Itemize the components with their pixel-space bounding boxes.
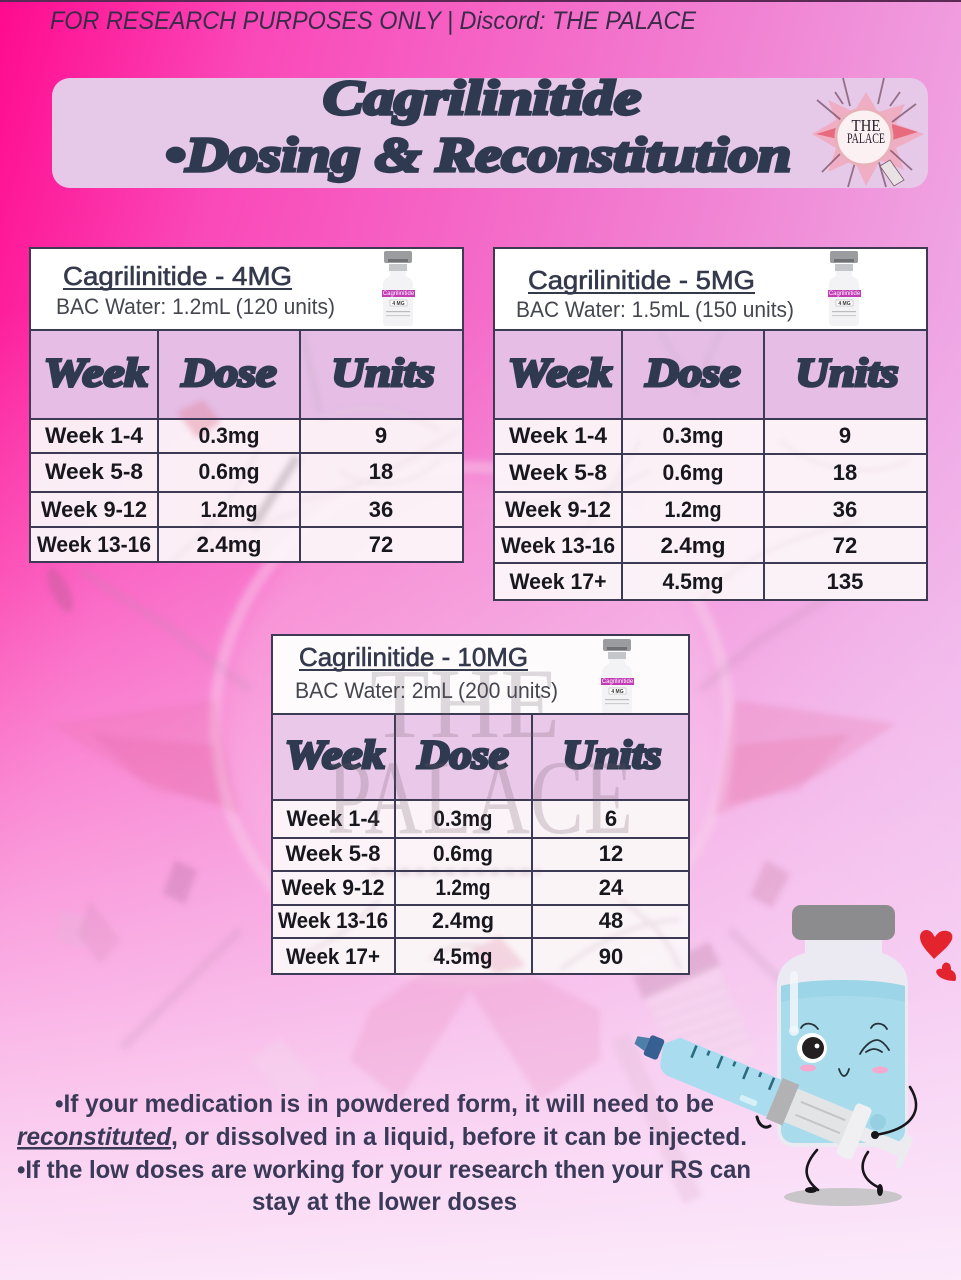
icon: vial bbox=[828, 251, 861, 326]
vial body bbox=[777, 938, 908, 1147]
table heading bbox=[56, 261, 335, 319]
icon: vial: 4 MG bbox=[838, 301, 851, 307]
table watermark sketch bbox=[290, 872, 680, 974]
table rows: 1.2mg bbox=[664, 497, 722, 522]
icon: vial: Cagrilinitide bbox=[383, 291, 415, 297]
table rows: Week 5-8 bbox=[45, 459, 143, 484]
table rows: 9 bbox=[839, 423, 851, 448]
table: 5MG bbox=[494, 248, 927, 600]
table heading: Cagrilinitide - 10MG bbox=[299, 642, 528, 672]
table rows: 0.3mg bbox=[434, 806, 492, 831]
table rows: 72 bbox=[833, 533, 857, 558]
table rows: Week 13-16 bbox=[278, 908, 388, 933]
table rows: Week 5-8 bbox=[509, 460, 607, 485]
column headers: Week bbox=[508, 350, 612, 395]
table rows: 4.5mg bbox=[434, 944, 492, 969]
table: 10MG bbox=[272, 635, 689, 974]
syringe bbox=[625, 1015, 918, 1179]
table rows: 9 bbox=[375, 423, 387, 448]
table watermark sketch bbox=[500, 332, 910, 600]
table rows: Week 9-12 bbox=[41, 497, 147, 522]
table rows: 0.3mg bbox=[198, 423, 260, 448]
column headers: Dose bbox=[416, 732, 508, 777]
watermark text over table: THE bbox=[370, 648, 560, 759]
logo: The Palace bbox=[812, 78, 924, 187]
table heading: BAC Water: 1.2mL (120 units) bbox=[56, 294, 335, 319]
cap bbox=[792, 905, 895, 940]
table watermark sketch bbox=[170, 332, 460, 562]
table rows: Week 1-4 bbox=[509, 423, 608, 448]
table rows bbox=[278, 806, 624, 969]
column headers: Dose bbox=[644, 350, 740, 395]
column headers: Week bbox=[285, 732, 385, 777]
table rows: Week 13-16 bbox=[501, 533, 615, 558]
column headers: Units bbox=[796, 350, 898, 395]
table rows: 0.6mg bbox=[433, 841, 493, 866]
column headers: Units bbox=[562, 732, 662, 777]
table rows: 72 bbox=[369, 532, 393, 557]
background watermark emblem bbox=[42, 467, 895, 1200]
highlight bbox=[790, 971, 798, 1033]
table rows: 90 bbox=[599, 944, 623, 969]
eye bbox=[797, 1033, 827, 1063]
table rows: 36 bbox=[833, 497, 857, 522]
table rows: Week 13-16 bbox=[37, 532, 151, 557]
table rows: 36 bbox=[369, 497, 393, 522]
title line 2: •Dosing & Reconstitution bbox=[165, 127, 791, 182]
arms and legs bbox=[807, 1087, 916, 1190]
column headers: Units bbox=[332, 350, 434, 395]
table rows: 2.4mg bbox=[660, 533, 726, 558]
title line 1: Cagrilinitide bbox=[323, 70, 641, 125]
icon: vial: 4 MG bbox=[611, 689, 624, 695]
column headers: Dose bbox=[180, 350, 276, 395]
table rows: 4.5mg bbox=[662, 569, 724, 594]
table rows: 24 bbox=[599, 875, 624, 900]
table rows: 0.3mg bbox=[662, 423, 724, 448]
table rows: Week 17+ bbox=[286, 944, 380, 969]
mascot: vial with syringe bbox=[625, 905, 918, 1206]
table rows: 12 bbox=[599, 841, 623, 866]
logo: The Palace: THE bbox=[852, 116, 880, 135]
table rows: Week 5-8 bbox=[286, 841, 380, 866]
logo: The Palace: PALACE bbox=[847, 131, 885, 147]
footer text block: •If the low doses are working for your research then your RS can bbox=[17, 1156, 751, 1184]
cheeks bbox=[800, 1064, 816, 1072]
table rows: Week 9-12 bbox=[505, 497, 611, 522]
watermark text over table: PALACE bbox=[327, 739, 633, 856]
disclaimer line: FOR RESEARCH PURPOSES ONLY | Discord: THE PALACE bbox=[50, 7, 696, 35]
icon: hearts bbox=[920, 930, 956, 981]
table heading: BAC Water: 2mL (200 units) bbox=[295, 678, 558, 703]
table: 4MG bbox=[30, 248, 463, 562]
table rows: 0.6mg bbox=[662, 460, 724, 485]
table rows: 48 bbox=[599, 908, 623, 933]
table heading bbox=[295, 642, 558, 703]
table heading: BAC Water: 1.5mL (150 units) bbox=[516, 297, 794, 322]
table heading: Cagrilinitide - 5MG bbox=[528, 265, 755, 295]
footer text block bbox=[17, 1090, 751, 1216]
column headers: Week bbox=[44, 350, 148, 395]
table rows: 1.2mg bbox=[436, 875, 490, 900]
liquid bbox=[781, 980, 905, 1143]
footer text block: reconstituted, or dissolved in a liquid, before it can be injected. bbox=[17, 1123, 747, 1151]
table rows: 18 bbox=[369, 459, 393, 484]
icon: vial bbox=[382, 251, 415, 326]
title banner bbox=[52, 70, 928, 188]
table heading bbox=[516, 265, 794, 322]
icon: vial: Cagrilinitide bbox=[602, 679, 634, 685]
top edge line bbox=[0, 0, 961, 2]
table rows: Week 17+ bbox=[510, 569, 606, 594]
shadow bbox=[784, 1188, 902, 1206]
table heading: Cagrilinitide - 4MG bbox=[63, 261, 292, 291]
wink and brows bbox=[801, 1024, 889, 1076]
icon: vial bbox=[601, 639, 634, 714]
column headers bbox=[508, 350, 898, 395]
left hand bbox=[757, 1117, 770, 1127]
watermark text over table bbox=[327, 648, 633, 856]
table rows: Week 9-12 bbox=[282, 875, 384, 900]
table rows: 2.4mg bbox=[196, 532, 262, 557]
column headers bbox=[285, 732, 662, 777]
icon: vial: Cagrilinitide bbox=[829, 291, 861, 297]
footer text block: •If your medication is in powdered form, it will need to be bbox=[55, 1090, 714, 1118]
table rows: 135 bbox=[827, 569, 863, 594]
table rows: 2.4mg bbox=[432, 908, 494, 933]
icon: vial: 4 MG bbox=[392, 301, 405, 307]
table rows: 18 bbox=[833, 460, 857, 485]
table rows bbox=[37, 423, 393, 557]
table rows: Week 1-4 bbox=[45, 423, 144, 448]
table rows: Week 1-4 bbox=[286, 806, 380, 831]
table rows bbox=[501, 423, 863, 594]
table rows: 6 bbox=[605, 806, 617, 831]
table rows: 0.6mg bbox=[198, 459, 260, 484]
footer text block: stay at the lower doses bbox=[252, 1188, 517, 1216]
table rows: 1.2mg bbox=[200, 497, 258, 522]
column headers bbox=[44, 350, 434, 395]
